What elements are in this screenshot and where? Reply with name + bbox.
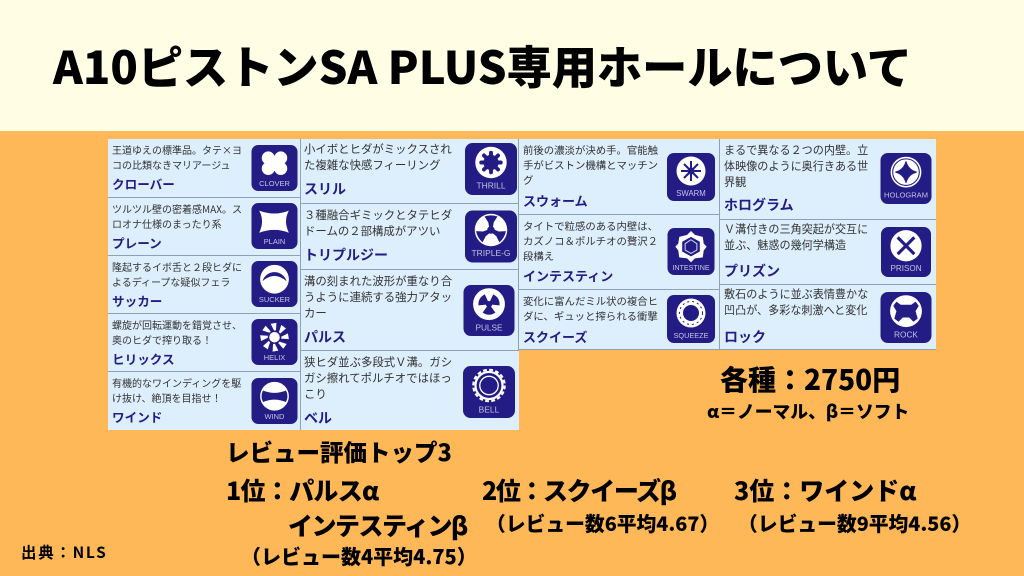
item: pulse: パルス [304,327,346,347]
item: hologram: ホログラム [724,195,794,215]
item: prison: 並ぶ、魅惑の幾何学構造 [724,237,846,253]
item: plain [108,198,301,256]
item: plain: プレーン [112,233,162,252]
item: intestine: カズノコ＆ポルチオの贅沢２ [523,233,658,248]
item: pulse: PULSE [475,324,503,333]
item: intestine: タイトで粒感のある内壁は、 [523,218,658,233]
item: sucker: よるディープな疑似フェラ [112,274,230,289]
rank 1 name b: インテスティンβ [288,507,467,543]
item: sucker [108,256,301,314]
panel: column 1 [108,139,301,430]
ranking heading: レビュー評価トップ3 [226,434,452,468]
item: rock: ROCK [894,331,918,340]
item: prison: PRISON [890,264,922,273]
item: squeeze [519,290,720,350]
title: A10ピストンSA PLUS専用ホールについて [53,33,912,98]
item: plain: ロオナ仕様のまったり系 [112,216,222,231]
item: prison: Ｖ溝付きの三角突起が交互に [724,221,868,237]
item: thrill: た複雑な快感フィーリング [304,157,440,173]
item: hologram: HOLOGRAM [884,191,928,200]
item: pulse: うように連続する強力アタッ [304,289,452,305]
item: rock: ロック [724,327,766,347]
item: squeeze: SQUEEZE [674,331,709,340]
item: swarm: 前後の濃淡が決め手。官能触 [523,142,658,157]
item: helix: 螺旋が回転運動を錯覚させ、 [112,317,242,332]
item: squeeze: 変化に富んだミル状の複合ヒ [523,293,658,308]
item: plain: ツルツル壁の密着感MAX。ス [112,201,242,216]
item: bell: こり [304,386,327,402]
source: 出典：NLS [21,541,107,563]
item: prison: プリズン [724,261,780,281]
item: hologram [720,139,936,220]
item: hologram: まるで異なる２つの内壁。立 [724,142,868,158]
item: pulse: 溝の刻まれた波形が重なり合 [304,273,452,289]
item: hologram: 界観 [724,174,746,190]
item: wind: 有機的なワインディングを駆 [112,375,241,390]
price: 各種：2750円 [720,359,900,399]
item: clover: CLOVER [259,179,290,188]
item: bell: BELL [479,405,500,415]
rank 3 [734,472,971,537]
item: squeeze: ダに、ギュッと搾られる衝撃 [523,308,658,323]
item: wind: WIND [265,412,285,421]
header band [0,0,1024,131]
item: intestine [519,215,720,290]
item: bell: ベル [304,408,332,428]
item: wind: ワインド [112,407,162,426]
rank 2 name: 2位：スクイーズβ [482,472,676,508]
rank 2 reviews: （レビュー数6平均4.67） [486,508,719,537]
item: triple-g [301,204,519,270]
item: rock: 凹凸が、多彩な刺激へと変化 [724,302,867,318]
item: thrill [301,139,519,204]
item: pulse [301,270,519,351]
item: prison [720,220,936,285]
item: helix: 奥のヒダで搾り取る！ [112,332,212,347]
item: bell: ガシ擦れてポルチオではほっ [304,370,452,386]
item: clover: コの比類なきマリアージュ [112,157,230,172]
item: triple-g: トリプルジー [304,245,388,265]
panel: column 4 [720,139,936,350]
rank 2 [482,472,719,537]
rank 1 reviews: （レビュー数4平均4.75） [241,541,477,570]
item: squeeze: スクイーズ [523,327,587,346]
item: bell [301,351,519,430]
panel: column 2 [301,139,519,430]
item: sucker: SUCKER [259,295,291,304]
item: swarm: SWARM [676,189,706,198]
item: intestine: インテスティン [523,266,613,285]
item: intestine: 段構え [523,248,554,263]
item: helix: ヒリックス [112,349,175,368]
item: swarm: グ [523,172,533,187]
item: sucker: 隆起するイボ舌と２段ヒダに [112,259,242,274]
item: plain: PLAIN [264,237,285,246]
item: rock [720,285,936,350]
item: triple-g: ドームの２部構成がアツい [304,223,440,239]
item: sucker: サッカー [112,291,162,310]
rank 3 name: 3位：ワインドα [734,472,916,508]
item: triple-g: ３種融合ギミックとタテヒダ [304,207,452,223]
item: clover: クローバー [112,174,175,193]
type legend: α＝ノーマル、β＝ソフト [707,398,909,424]
item: wind [108,372,301,430]
item: swarm: スウォーム [523,191,588,210]
item: clover: 王道ゆえの標準品。タテ×ヨ [112,142,242,157]
item: intestine: INTESTINE [672,264,710,272]
item: rock: 敷石のように並ぶ表情豊かな [724,286,868,302]
item: wind: け抜け、絶頂を目指せ！ [112,390,222,405]
item: hologram: 体映像のように奥行きある世 [724,158,868,174]
item: pulse: カー [304,305,327,321]
item: swarm: 手がビストン機構とマッチン [523,157,658,172]
rank 3 reviews: （レビュー数9平均4.56） [738,508,971,537]
item: clover [108,139,301,198]
item: thrill: スリル [304,179,346,199]
item: helix: HELIX [264,353,285,362]
item: bell: 狭ヒダ並ぶ多段式Ｖ溝。ガシ [304,354,452,370]
panel: column 3 [519,139,720,350]
item: thrill: THRILL [476,180,506,190]
item: triple-g: TRIPLE-G [472,248,510,258]
rank 1 name a: 1位：パルスα [226,472,378,508]
item: thrill: 小イボとヒダがミックスされ [304,141,452,157]
item: swarm [519,139,720,215]
rank 1 [226,472,477,570]
item: helix [108,314,301,372]
